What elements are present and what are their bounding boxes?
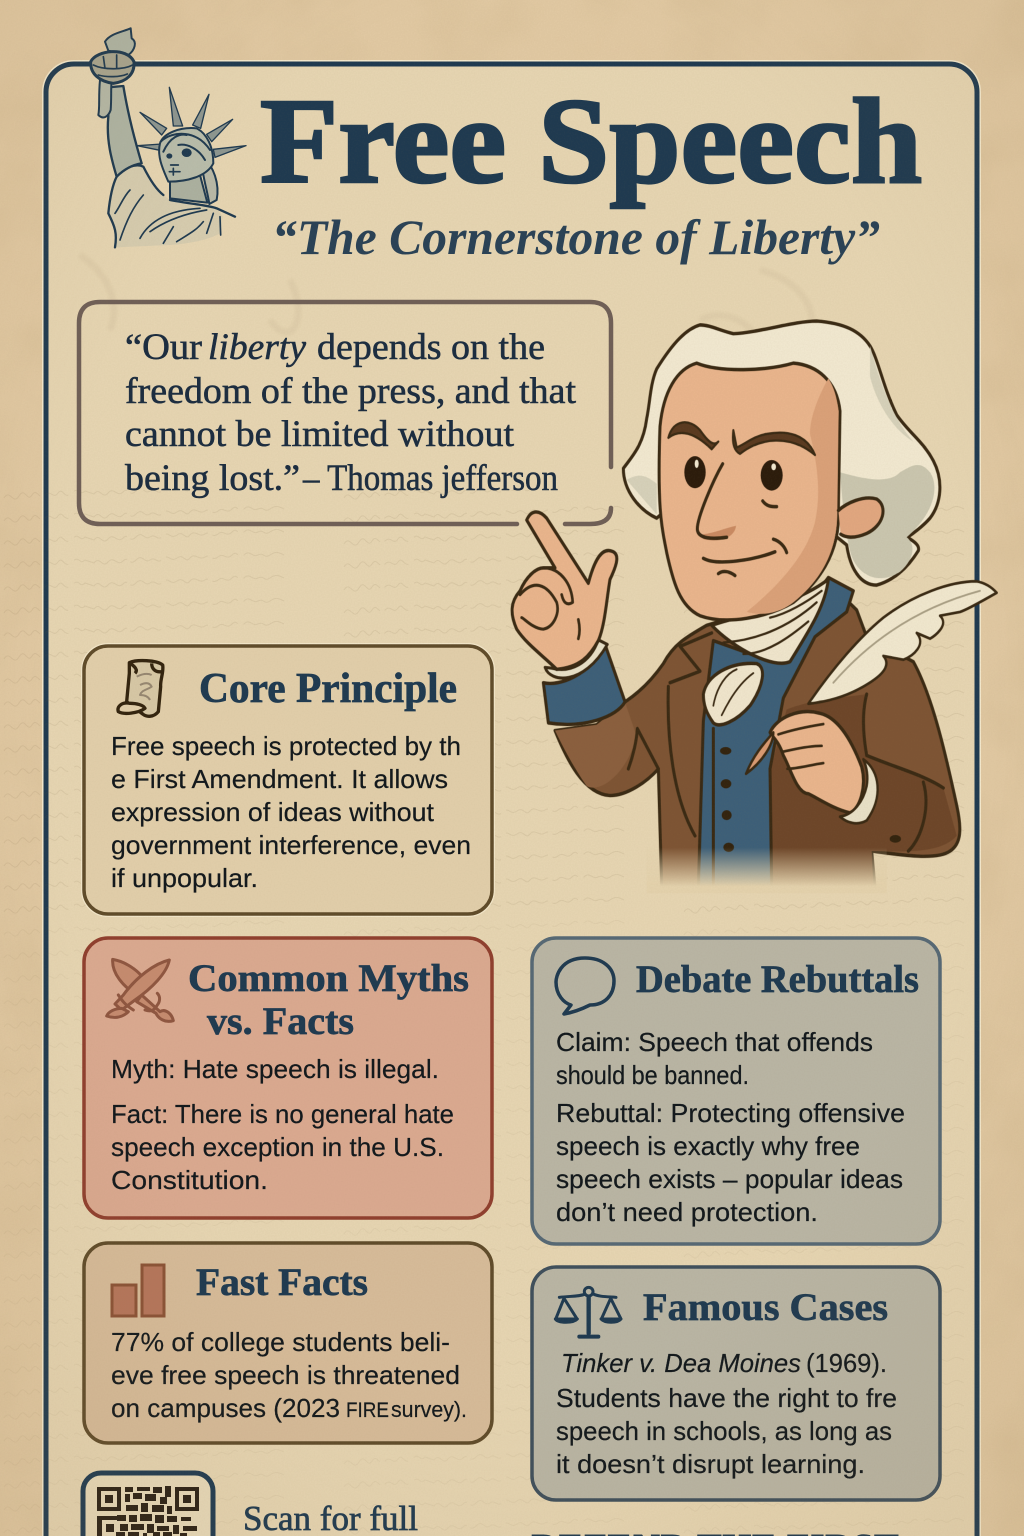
heading: Famous Cases: [643, 1286, 888, 1329]
icon: scales of justice: [555, 1287, 621, 1337]
coat: [555, 587, 960, 887]
hand: [98, 80, 112, 117]
body text: Students have the right to fre: [556, 1383, 897, 1413]
body text: Tinker v. Dea Moines: [561, 1348, 801, 1378]
body text: [556, 1348, 897, 1479]
ear: [838, 498, 883, 537]
eyebrows: [668, 422, 718, 449]
body text: [111, 1327, 467, 1423]
heading: Debate Rebuttals: [636, 958, 919, 1001]
body text: should be banned.: [556, 1060, 749, 1090]
left hand: [512, 512, 617, 669]
panel: Debate Rebuttals: [532, 938, 940, 1244]
body text: government interference, even: [111, 830, 471, 860]
face: [659, 363, 840, 620]
quote text: freedom of the press, and that: [125, 371, 577, 412]
body text: on campuses (2023: [111, 1393, 340, 1423]
body text: speech in schools, as long as: [556, 1416, 892, 1446]
heading: Fast Facts: [196, 1261, 368, 1304]
quill nib: [746, 732, 773, 774]
panel: Common Myths vs. Facts: [84, 938, 492, 1218]
panel: Core Principle: [84, 646, 492, 914]
panel: quote bubble: [79, 302, 611, 524]
subtitle: “The Cornerstone of Liberty”: [272, 209, 880, 265]
torch cup: [91, 52, 134, 83]
body text: (1969).: [806, 1348, 887, 1378]
quote text: liberty: [208, 327, 307, 368]
body text: [111, 731, 471, 893]
panel: Fast Facts: [84, 1243, 492, 1443]
body text: it doesn’t disrupt learning.: [556, 1449, 865, 1479]
body text: e First Amendment. It allows: [111, 764, 448, 794]
body text: Constitution.: [111, 1165, 268, 1195]
face: [159, 128, 213, 182]
hair shading: [840, 465, 934, 578]
body text: expression of ideas without: [111, 797, 435, 827]
right hand: [770, 712, 863, 813]
body text: Myth: Hate speech is illegal.: [111, 1054, 439, 1084]
body text: don’t need protection.: [556, 1197, 818, 1227]
left cuff (blue): [543, 644, 625, 724]
eyes: [684, 456, 706, 488]
heading: Common Myths: [188, 957, 469, 1000]
right cuff: [840, 759, 878, 823]
arm: [108, 86, 142, 177]
quote text: [125, 327, 577, 499]
quote text: “Our: [125, 327, 202, 368]
robe: [108, 165, 223, 247]
body text: Rebuttal: Protecting offensive: [556, 1098, 905, 1128]
cravat knot: [703, 663, 762, 725]
icon: bar chart: [112, 1265, 164, 1316]
body text: Fact: There is no general hate: [111, 1099, 454, 1129]
neck: [170, 175, 207, 203]
hair back: [623, 321, 940, 585]
waistcoat: [698, 577, 853, 887]
body text: eve free speech is threatened: [111, 1360, 460, 1390]
body text: Free speech is protected by th: [111, 731, 461, 761]
body text: [556, 1027, 905, 1227]
body text: FIRE: [346, 1399, 389, 1422]
body text: Claim: Speech that offends: [556, 1027, 873, 1057]
body text: 77% of college students beli-: [111, 1327, 450, 1357]
body text: speech exception in the U.S.: [111, 1132, 444, 1162]
flame: [105, 28, 135, 55]
feather: [808, 581, 997, 704]
body text: speech exists – popular ideas: [556, 1164, 903, 1194]
face shadow: [747, 378, 839, 614]
icon: crossed swords: [107, 959, 173, 1021]
icon: Statue of Liberty: [91, 28, 246, 247]
heading: Core Principle: [199, 666, 457, 712]
QR code: [83, 1473, 213, 1536]
hair: [202, 157, 218, 204]
icon: speech bubble: [556, 958, 614, 1014]
quote text: cannot be limited without: [125, 414, 515, 455]
body text: survey).: [391, 1397, 467, 1422]
quote text: depends on the: [317, 327, 545, 368]
crown spikes: [137, 87, 246, 157]
coat shading: [770, 694, 957, 886]
quote text: – Thomas jefferson: [302, 458, 558, 499]
panel: Famous Cases: [532, 1267, 940, 1500]
bottom fade: [647, 847, 887, 893]
nose and mouth: [703, 526, 736, 540]
body text: speech is exactly why free: [556, 1131, 860, 1161]
cravat: [712, 579, 828, 663]
body text: if unpopular.: [111, 863, 258, 893]
body text: [111, 1054, 454, 1195]
icon: scroll: [118, 661, 163, 716]
left white cuff: [545, 640, 607, 678]
panel: Common Myths vs. Facts: vs. Facts: [207, 1000, 354, 1043]
illustration: Thomas Jefferson: [512, 321, 997, 893]
title: Free Speech: [260, 74, 922, 209]
quote text: being lost.”: [125, 458, 300, 499]
